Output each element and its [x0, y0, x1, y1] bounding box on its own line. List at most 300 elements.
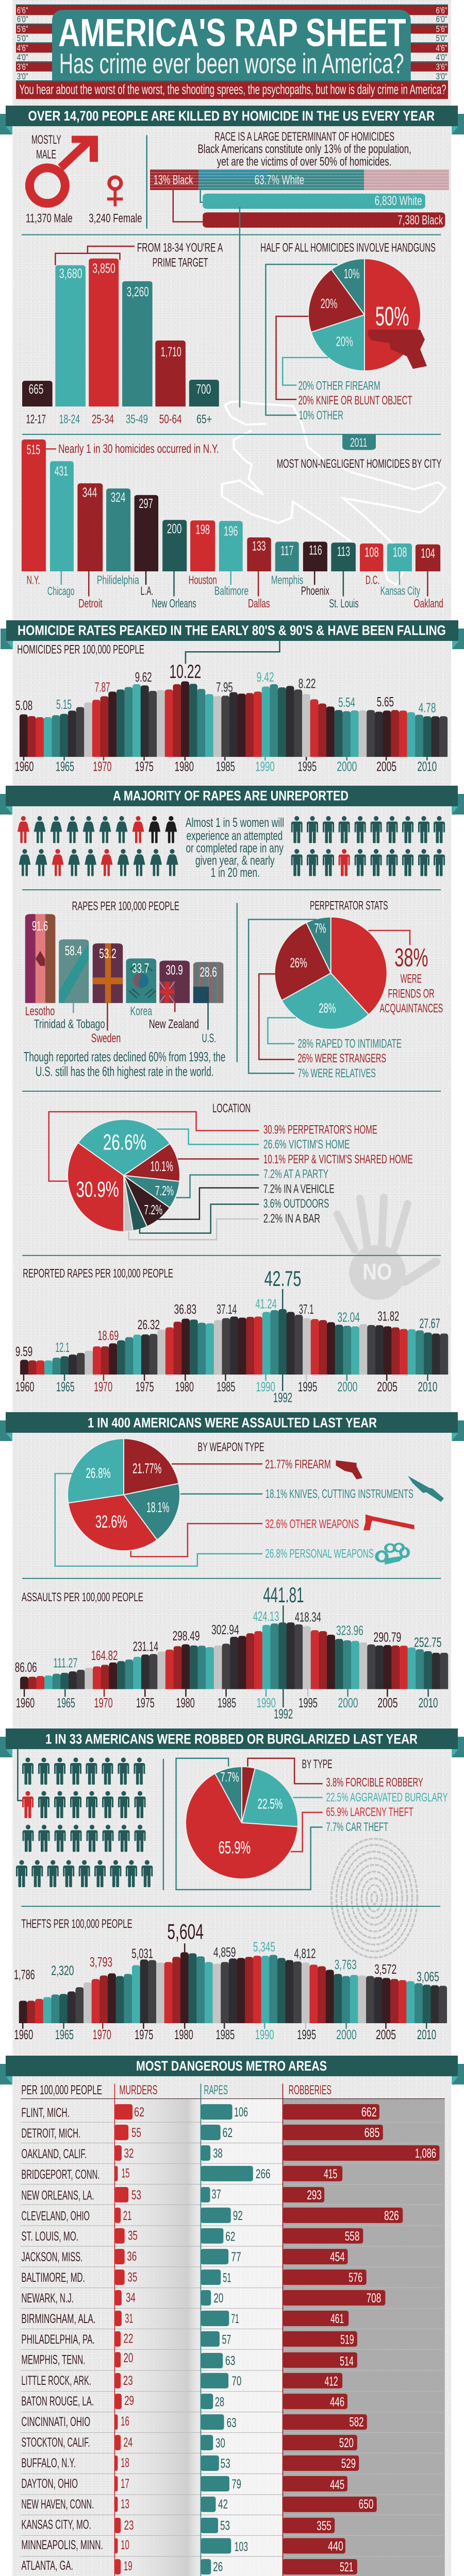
age bar labels: 65+	[196, 413, 212, 427]
table rows: FLINT, MICH.	[21, 2106, 70, 2120]
chart: rapes by country	[22, 889, 441, 1079]
pie chart: location: 7.2% AT A PARTY	[263, 1167, 328, 1181]
chart: homicides by city	[22, 434, 441, 575]
table rows: 28	[215, 2395, 224, 2409]
chart: reported rapes: 37.1	[299, 1301, 313, 1317]
assault chart years: 1995	[299, 1695, 318, 1710]
chart: reported rapes: 1975	[136, 1379, 154, 1395]
age bar labels: 12-17	[26, 413, 46, 427]
chart: reported rapes: 41.24	[255, 1296, 277, 1311]
panel: handgun pie chart: 10% OTHER	[299, 409, 343, 422]
table rows: 708	[367, 2291, 381, 2306]
chart: rapes by country: RAPES PER 100,000 PEOPLE	[72, 899, 179, 913]
pie chart: location: 7.2%	[144, 1202, 162, 1217]
chart: reported rapes: 1992	[273, 1389, 292, 1405]
chart: homicides per 100,000: 2000	[337, 759, 357, 774]
chart: homicides by city: 196	[224, 523, 238, 538]
chart: reported rapes: 1960	[15, 1379, 35, 1395]
table rows: 62	[223, 2126, 233, 2140]
table rows: 266	[256, 2167, 271, 2181]
city labels: New Orleans	[152, 597, 196, 610]
table rows: 19	[124, 2559, 132, 2573]
age bar labels: 3,260	[127, 284, 149, 299]
table rows: 71	[231, 2312, 239, 2326]
chart: homicides per 100,000: 7.87	[95, 679, 110, 694]
chart: reported rapes	[15, 1268, 449, 1402]
chart: thefts per 100,000: 5,345	[253, 1939, 275, 1954]
table rows: 106	[234, 2105, 248, 2120]
city labels: Memphis	[271, 573, 303, 586]
table rows: 685	[364, 2126, 379, 2140]
text: experience an attempted	[187, 829, 283, 843]
pie chart: perpetrator stats	[22, 899, 443, 1115]
header: title block: 4'6"	[17, 43, 28, 53]
text: or completed rape in any	[186, 841, 284, 855]
table rows: 650	[359, 2497, 373, 2512]
table rows: 514	[340, 2354, 354, 2368]
chart: rapes by country: Sweden	[91, 1031, 121, 1045]
chart: assaults per 100,000: 441.81	[263, 1583, 304, 1607]
table rows: 55	[131, 2126, 141, 2140]
header: title block: 3'0"	[17, 72, 28, 81]
table rows: 63	[227, 2416, 237, 2430]
icons: people grid	[16, 1757, 153, 1887]
age bar labels: 1,710	[161, 344, 181, 359]
table rows: KANSAS CITY, MO.	[21, 2517, 91, 2532]
table rows: 519	[340, 2333, 354, 2347]
table rows: 662	[361, 2105, 377, 2120]
chart: homicides by city: 2011	[350, 436, 367, 450]
panel: mostly male	[26, 133, 147, 229]
icon: brass knuckles	[377, 1544, 408, 1565]
chart: homicides by city: 324	[111, 489, 125, 505]
chart: reported rapes: 1970	[94, 1379, 112, 1395]
chart: thefts per 100,000: 1965	[55, 2027, 74, 2042]
chart: thefts per 100,000: 1980	[174, 2027, 193, 2042]
chart: rapes by country: 53.2	[99, 945, 117, 961]
header: title block: 3'6"	[17, 62, 28, 72]
chart: homicides by city: 104	[421, 545, 435, 561]
icons: men	[291, 816, 445, 876]
text: 4'6"	[436, 43, 447, 53]
text: PRIME TARGET	[153, 256, 208, 269]
chart: assaults per 100,000: 290.79	[373, 1629, 401, 1645]
chart: thefts per 100,000: 5,604	[167, 1920, 204, 1944]
text: Almost 1 in 5 women will	[186, 816, 284, 830]
age bar labels: 18-24	[59, 413, 80, 427]
table rows: BUFFALO, N.Y.	[21, 2456, 76, 2470]
pie chart: perpetrator stats: LOCATION	[212, 1101, 251, 1115]
table rows: 558	[345, 2229, 359, 2244]
chart: thefts per 100,000: 2,320	[51, 1963, 74, 1978]
chart: homicides by city: 117	[280, 543, 293, 558]
banner: assaults	[0, 1412, 464, 1441]
chart: assaults per 100,000: 302.94	[211, 1622, 239, 1637]
chart: rapes by country: Korea	[130, 1004, 152, 1018]
chart: homicides by city: 116	[309, 543, 322, 557]
chart: assaults per 100,000: 424.13	[253, 1608, 279, 1624]
chart: homicides per 100,000: 1970	[93, 759, 111, 774]
table rows: 37	[211, 2188, 221, 2201]
table rows: 13	[121, 2497, 129, 2511]
table rows: 31	[125, 2312, 133, 2326]
age bar labels: 700	[196, 382, 211, 397]
table rows: MEMPHIS, TENN.	[21, 2353, 85, 2367]
table rows: 15	[121, 2166, 129, 2180]
table rows: 57	[222, 2333, 231, 2347]
chart: reported rapes: 32.04	[337, 1310, 360, 1325]
city labels: Baltimore	[214, 584, 248, 598]
table rows: BALTIMORE, MD.	[21, 2270, 85, 2285]
chart: reported rapes: 31.82	[377, 1309, 399, 1324]
pie chart: weapon type: 32.6%	[95, 1512, 127, 1532]
city labels: Houston	[189, 573, 217, 586]
table rows: 34	[126, 2291, 136, 2305]
table rows: MINNEAPOLIS, MINN.	[21, 2538, 103, 2552]
table rows: 582	[349, 2415, 363, 2429]
chart: thefts per 100,000: 3,572	[374, 1961, 396, 1977]
text: FROM 18-34 YOU'RE A	[137, 241, 223, 255]
panel: handgun pie chart	[260, 241, 436, 422]
age bar labels: 35-49	[126, 413, 148, 427]
chart: homicides per 100,000	[15, 641, 448, 771]
table rows: 461	[330, 2312, 344, 2326]
icon: no hand	[337, 1197, 436, 1300]
table rows: 24	[123, 2435, 132, 2450]
chart: rapes by country: 33.7	[132, 960, 149, 976]
table rows: STOCKTON, CALIF.	[21, 2435, 90, 2450]
chart: homicides per 100,000: 5.08	[15, 698, 32, 713]
panel: handgun pie chart: 50%	[375, 301, 409, 331]
chart: homicides by city: Nearly 1 in 30 homicides occurred in N.Y.	[58, 442, 219, 456]
table rows: 53	[131, 2188, 141, 2202]
chart: thefts per 100,000: 4,812	[294, 1946, 316, 1961]
pie chart: crime by type: 7.7%	[221, 1769, 239, 1785]
chart: homicides per 100,000: 9.62	[135, 669, 152, 685]
table rows: 32	[124, 2146, 134, 2161]
chart: thefts per 100,000	[14, 1917, 447, 2160]
table rows: BIRMINGHAM, ALA.	[21, 2312, 95, 2326]
chart: thefts per 100,000: 1,786	[14, 1967, 35, 1982]
chart: homicides per 100,000: 1980	[175, 759, 194, 774]
pie chart: crime by type: BY TYPE	[302, 1757, 333, 1771]
pie chart: location: 10.1%	[151, 1159, 173, 1175]
table rows: 53	[221, 2456, 230, 2471]
banner: assaults: 1 IN 400 AMERICANS WERE ASSAULTED LAST YEAR	[88, 1415, 377, 1431]
pie chart: location: 7.2% IN A VEHICLE	[263, 1182, 335, 1196]
banner: dangerous metro areas	[0, 2056, 464, 2084]
table rows: BRIDGEPORT, CONN.	[21, 2167, 100, 2182]
city labels	[27, 571, 443, 610]
table rows: 30	[216, 2436, 225, 2450]
chalk body outline	[222, 401, 445, 585]
chart: rapes by country: 91.6	[32, 918, 48, 934]
icon: no hand: NO	[362, 1259, 392, 1285]
table: metro areas	[21, 2083, 445, 2576]
assault chart years: 1960	[16, 1695, 35, 1710]
table rows: 521	[340, 2560, 353, 2574]
pie chart: weapon type	[22, 1438, 444, 1579]
banner: rapes unreported	[0, 786, 464, 815]
table rows: NEW HAVEN, CONN.	[21, 2497, 94, 2512]
panel: mostly male: MOSTLY	[31, 133, 61, 147]
table rows: 293	[307, 2188, 322, 2202]
table rows: 412	[325, 2375, 338, 2388]
chart: thefts per 100,000: 1970	[93, 2027, 111, 2042]
city labels: L.A.	[141, 584, 153, 598]
chart: homicides by city: 515	[27, 442, 40, 457]
table rows: 36	[127, 2249, 137, 2264]
table rows: 529	[341, 2456, 356, 2471]
chart: homicides by city: 431	[55, 463, 68, 479]
panel: race determinant: 13% Black	[154, 173, 193, 187]
pie chart: weapon type: BY WEAPON TYPE	[197, 1440, 264, 1454]
chart: homicides by city: 198	[195, 522, 210, 537]
table rows: ATLANTA, GA.	[21, 2558, 73, 2573]
chart: assaults per 100,000: 323.96	[336, 1623, 363, 1638]
pie chart: location: 30.9%	[76, 1177, 119, 1201]
table rows: 38	[213, 2146, 223, 2161]
chart: homicides per 100,000: 1965	[56, 759, 74, 774]
chart: thefts per 100,000: 5,031	[131, 1946, 153, 1961]
pie chart: weapon type: 26.8%	[86, 1466, 111, 1481]
panel: handgun pie chart: 10%	[344, 266, 359, 281]
chart: reported rapes: 42.75	[264, 1267, 301, 1291]
assault chart years	[16, 1689, 438, 1722]
table rows: 445	[330, 2478, 344, 2492]
chart: reported rapes: 18.69	[97, 1328, 119, 1343]
table rows: PHILADELPHIA, PA.	[21, 2332, 95, 2347]
table rows: 21	[123, 2209, 131, 2223]
table rows: NEW ORLEANS, LA.	[21, 2189, 94, 2203]
chart: homicides by city: 344	[82, 484, 97, 500]
table rows: BATON ROUGE, LA.	[21, 2394, 94, 2409]
chart: homicides per 100,000: 1960	[15, 759, 34, 774]
age bar labels: 665	[29, 382, 43, 397]
chart: reported rapes: 2005	[377, 1379, 397, 1395]
age bar labels: 25-34	[92, 413, 114, 427]
chart: thefts per 100,000: 3,793	[90, 1954, 112, 1970]
banner: rapes unreported: A MAJORITY OF RAPES ARE UNREPORTED	[113, 788, 349, 804]
chart: assaults per 100,000: 418.34	[295, 1609, 321, 1625]
table rows: 42	[218, 2497, 228, 2512]
chart: thefts per 100,000: 2000	[336, 2027, 357, 2042]
table rows: 53	[220, 2518, 230, 2533]
chart: homicides by city: 297	[139, 496, 153, 511]
text: 4'0"	[436, 53, 447, 62]
chart: thefts per 100,000: 1960	[14, 2027, 33, 2042]
table rows: 20	[123, 2351, 133, 2365]
chart: homicides per 100,000: 10.22	[169, 660, 201, 682]
chart: assaults per 100,000: 164.82	[91, 1648, 118, 1663]
table rows: 10	[121, 2538, 129, 2552]
table rows: 826	[384, 2209, 399, 2223]
table rows: CLEVELAND, OHIO	[21, 2209, 90, 2224]
table rows	[21, 2104, 442, 2576]
chart: thefts per 100,000: THEFTS PER 100,000 PEOPLE	[21, 1917, 132, 1931]
pie chart: perpetrator stats: WERE	[401, 972, 422, 986]
assault chart years: 2000	[338, 1695, 358, 1710]
banner: over 14,700 people	[0, 106, 464, 134]
panel: mostly male: 11,370 Male	[26, 211, 73, 225]
city labels: Dallas	[248, 597, 270, 610]
age bar labels: 50-64	[159, 413, 181, 427]
panel: race determinant: 63.7% White	[255, 173, 304, 187]
table rows: DAYTON, OHIO	[21, 2477, 78, 2491]
pie chart: weapon type: 18.1%	[146, 1500, 169, 1516]
chart: reported rapes: 2000	[337, 1379, 357, 1395]
city labels: N.Y.	[27, 573, 40, 586]
table rows: DETROIT, MICH.	[21, 2126, 80, 2141]
text: 3'6"	[436, 62, 447, 72]
chart: reported rapes: 1985	[217, 1379, 235, 1395]
chart: reported rapes: 36.83	[174, 1301, 196, 1317]
table rows: 20	[213, 2291, 223, 2306]
pie chart: crime by type: 65.9%	[219, 1838, 251, 1857]
assault chart years: 1980	[176, 1695, 195, 1710]
assault chart years: 1985	[218, 1695, 236, 1710]
chart: homicides per 100,000: 5.65	[377, 694, 394, 709]
table rows: 576	[349, 2270, 362, 2285]
age bar labels: 3,680	[59, 266, 82, 281]
table rows: 16	[121, 2414, 129, 2429]
chart: reported rapes: REPORTED RAPES PER 100,000 PEOPLE	[23, 1267, 173, 1280]
chart: homicides per 100,000: 5.15	[56, 697, 72, 712]
panel: mostly male: MALE	[36, 147, 56, 161]
table rows: 26	[213, 2560, 223, 2574]
city labels: Detroit	[78, 597, 103, 610]
chart: homicides per 100,000: HOMICIDES PER 100,000 PEOPLE	[17, 643, 144, 657]
chart: reported rapes: 37.14	[217, 1301, 237, 1317]
table rows: 520	[339, 2436, 354, 2450]
table rows: 23	[123, 2374, 133, 2388]
assault chart years: 1990	[257, 1695, 276, 1710]
banner: robbed or burglarized	[0, 1728, 464, 1757]
chart: rapes by country: U.S.	[202, 1031, 216, 1045]
icons: women	[18, 816, 178, 876]
age bar labels	[26, 207, 240, 427]
chart: assaults per 100,000: 86.06	[15, 1659, 37, 1675]
chart: assaults per 100,000	[15, 1587, 449, 1689]
chart: homicides per 100,000: 1975	[135, 759, 154, 774]
text: 3'0"	[436, 72, 447, 81]
table rows: 70	[231, 2374, 241, 2388]
icon: revolver	[336, 1460, 362, 1480]
pie chart: crime by type: 22.5%	[257, 1796, 283, 1812]
panel: handgun pie chart: 20%	[321, 296, 337, 311]
table rows: 22	[123, 2332, 133, 2346]
table rows: CINCINNATI, OHIO	[21, 2415, 90, 2429]
table rows: JACKSON, MISS.	[21, 2250, 82, 2264]
chart: rapes by country: 28.6	[200, 964, 217, 979]
chart: reported rapes: 12.1	[55, 1340, 70, 1355]
table rows: NEWARK, N.J.	[21, 2291, 74, 2306]
panel: race determinant	[22, 130, 449, 235]
chart: homicides by city: 200	[167, 521, 181, 536]
header: title block: 5'6"	[17, 24, 28, 34]
pie chart: location: 3.6% OUTDOORS	[263, 1197, 329, 1211]
pie chart: location: 7.2%	[155, 1183, 174, 1198]
pie chart: weapon type: 21.77% FIREARM	[265, 1458, 331, 1471]
assault chart years: 1970	[94, 1695, 113, 1710]
chart: homicides by city: 108	[393, 545, 407, 560]
chart: victims by age	[22, 241, 223, 410]
assault chart years: 1965	[57, 1695, 75, 1710]
icon: fingerprint	[332, 1839, 417, 1958]
table rows: 440	[328, 2539, 343, 2553]
header: title block: 6'6"	[17, 6, 28, 15]
chart: homicides per 100,000: 2005	[376, 759, 396, 774]
header: title block: 6'0"	[17, 14, 28, 24]
chart: homicides by city: 133	[252, 538, 266, 553]
table rows: LITTLE ROCK, ARK.	[21, 2374, 91, 2388]
text: 5'0"	[436, 33, 447, 43]
assault chart years: 2005	[377, 1695, 397, 1710]
chart: rapes by country: New Zealand	[149, 1017, 199, 1031]
chart: thefts per 100,000: 3,763	[335, 1957, 357, 1972]
city labels: Philidelphia	[97, 573, 139, 586]
text: 1 in 5 women: 1 in 20 men.	[211, 866, 260, 880]
chart: thefts per 100,000: 1975	[135, 2027, 153, 2042]
table rows: 51	[223, 2271, 231, 2285]
chart: homicides per 100,000: 7.95	[216, 679, 233, 694]
text: 6'0"	[436, 14, 447, 24]
table rows: 103	[235, 2539, 248, 2554]
text: given year, & nearly	[195, 854, 275, 868]
icon: knife	[408, 1476, 444, 1502]
panel: handgun pie chart: 20%	[336, 334, 353, 349]
chart: homicides per 100,000: 1990	[255, 759, 275, 774]
table rows: ST. LOUIS, MO.	[21, 2229, 78, 2244]
chart: reported rapes: 1990	[256, 1379, 275, 1395]
table rows: 35	[127, 2270, 137, 2284]
chart: homicides by city: 113	[337, 544, 350, 559]
pie chart: location: 2.2% IN A BAR	[263, 1212, 320, 1226]
table rows: 446	[330, 2395, 344, 2409]
table rows: 79	[231, 2477, 241, 2492]
table rows: 62	[134, 2105, 144, 2120]
table rows: 355	[317, 2519, 332, 2533]
city labels: Chicago	[47, 584, 75, 598]
table rows: 62	[225, 2230, 235, 2244]
chart: thefts per 100,000: 1985	[216, 2027, 235, 2042]
pie chart: perpetrator stats: 7%	[314, 920, 326, 936]
table rows: 18	[121, 2456, 129, 2470]
table rows: 17	[121, 2477, 129, 2491]
chart: rapes by country: Trinidad & Tobago	[34, 1017, 105, 1031]
age bar labels: 3,850	[92, 261, 115, 276]
chart: rapes by country: 30.9	[165, 962, 183, 977]
chart: homicides per 100,000: 1995	[297, 759, 317, 774]
chart: rapes by country: U.S. still has the 6th highest rate in the world.	[36, 1064, 213, 1079]
table header: MURDERS	[119, 2083, 157, 2097]
table rows: 35	[128, 2229, 138, 2243]
assault chart years: 1992	[274, 1706, 293, 1722]
text: 1 in 5 women	[186, 816, 284, 880]
pie chart: perpetrator stats: 26%	[290, 955, 307, 970]
table rows: 23	[124, 2518, 134, 2533]
chart: assaults per 100,000: ASSAULTS PER 100,000 PEOPLE	[22, 1590, 143, 1604]
chart: reported rapes: 1965	[56, 1379, 75, 1395]
header: title block	[16, 5, 448, 99]
pie chart: location	[22, 1112, 441, 1256]
chart: assaults per 100,000: 298.49	[173, 1628, 200, 1643]
chart: assaults per 100,000: 111.27	[53, 1655, 77, 1670]
banner: dangerous metro areas: MOST DANGEROUS METRO AREAS	[136, 2058, 327, 2074]
table rows: OAKLAND, CALIF.	[21, 2147, 87, 2161]
table rows: 92	[233, 2209, 243, 2223]
chart: homicides per 100,000: 9.42	[257, 669, 274, 685]
